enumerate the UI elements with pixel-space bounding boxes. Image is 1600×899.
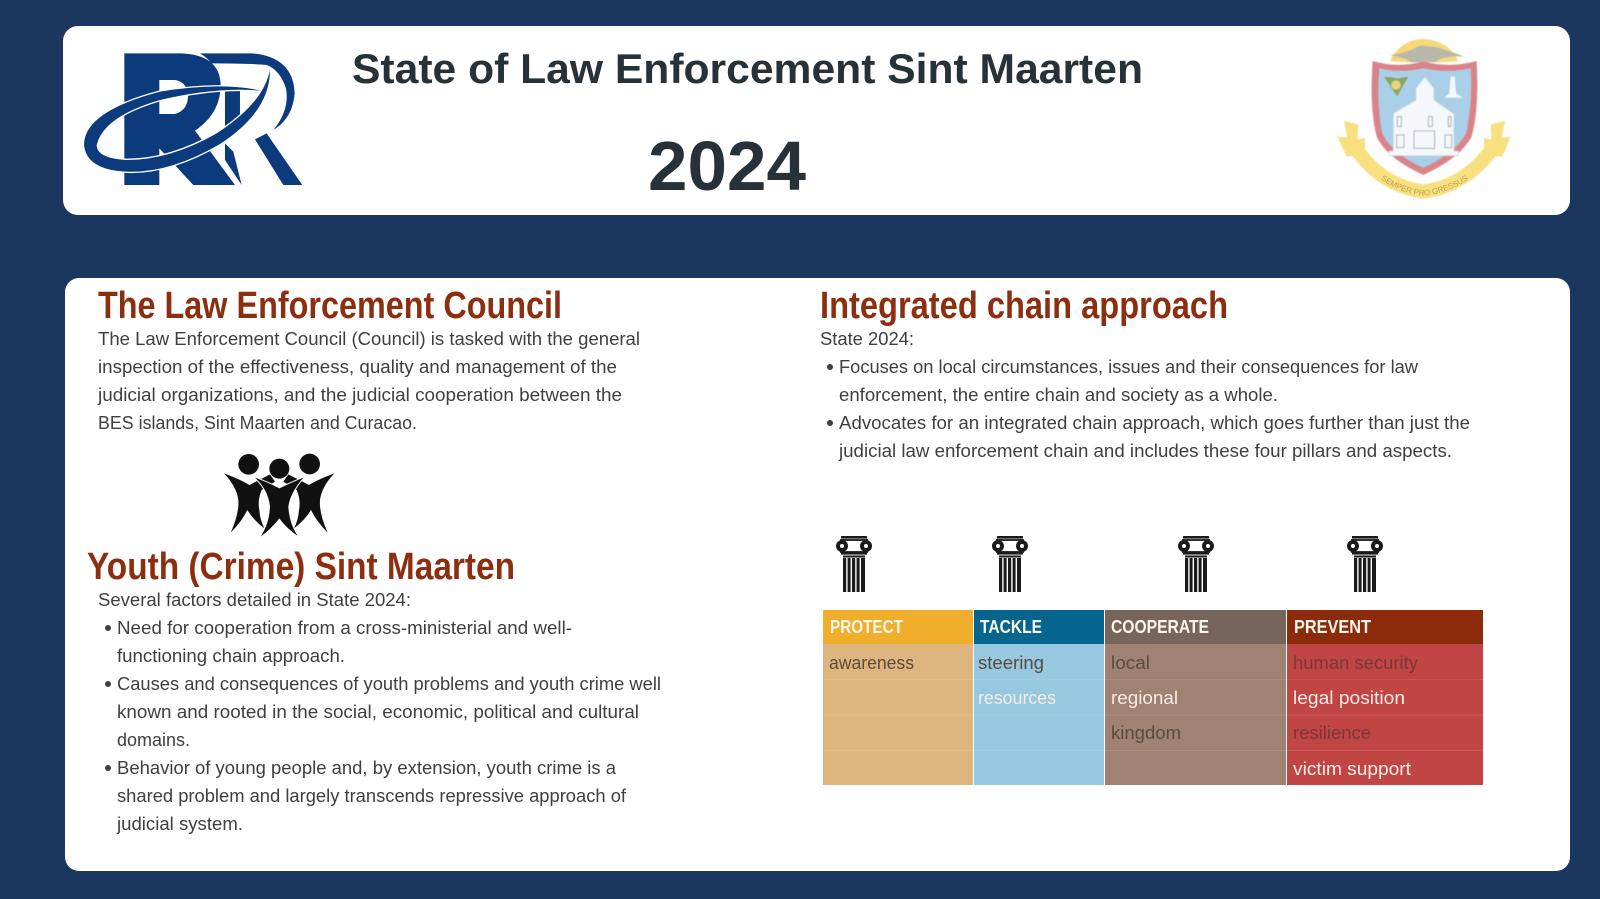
text block: integrated chain approach: judicial law enforcement chain and includes these four pillars and aspects. xyxy=(838,441,1452,461)
text block: youth crime factors: Need for cooperation from a cross-ministerial and well- xyxy=(117,618,572,638)
text block: youth crime factors: shared problem and largely transcends repressive approach of xyxy=(117,786,627,806)
icon: pillar protect xyxy=(836,536,872,592)
icon: pillar prevent xyxy=(1347,536,1383,592)
table: four pillars xyxy=(823,610,1483,785)
year: 2024 xyxy=(648,127,806,205)
text block: integrated chain approach: Focuses on local circumstances, issues and their consequences for law xyxy=(839,357,1419,377)
icon: pillar cooperate xyxy=(1178,536,1214,592)
heading: Integrated chain approach: Integrated chain approach xyxy=(820,285,1228,327)
text block: council description: inspection of the effectiveness, quality and management of the xyxy=(98,357,617,377)
column: prevent: human security xyxy=(1293,653,1418,673)
text block: youth crime factors: domains. xyxy=(117,730,190,750)
text block: youth crime factors: judicial system. xyxy=(116,814,243,834)
heading: The Law Enforcement Council: The Law Enforcement Council xyxy=(98,285,562,327)
text block: youth crime factors: Causes and consequences of youth problems and youth crime well xyxy=(117,674,661,694)
text block: council description: judicial organizations, and the judicial cooperation between the xyxy=(97,385,622,405)
text block: integrated chain approach: Advocates for an integrated chain approach, which goes further than just the xyxy=(839,413,1470,433)
logo: double R with orbit xyxy=(84,53,302,185)
text block: council description: BES islands, Sint Maarten and Curacao. xyxy=(98,413,417,433)
main content panel xyxy=(65,278,1570,871)
text block: integrated chain approach xyxy=(820,329,1470,461)
text block: youth crime factors: Several factors detailed in State 2024: xyxy=(98,590,411,610)
column: prevent: resilience xyxy=(1293,723,1371,743)
column: cooperate: regional xyxy=(1111,688,1178,708)
text block: youth crime factors: known and rooted in the social, economic, political and cultural xyxy=(117,702,639,722)
column: prevent: PREVENT xyxy=(1294,617,1371,637)
column: tackle: TACKLE xyxy=(980,617,1042,637)
column: cooperate: local xyxy=(1111,653,1150,673)
column: prevent: victim support xyxy=(1293,759,1411,779)
text block: council description: The Law Enforcement Council (Council) is tasked with the general xyxy=(98,329,640,349)
column: tackle: steering xyxy=(978,653,1044,673)
column: prevent xyxy=(1287,610,1483,785)
text block: integrated chain approach: State 2024: xyxy=(820,329,914,349)
column: protect: awareness xyxy=(829,653,914,673)
column: tackle: resources xyxy=(978,688,1056,708)
icon: coat of arms of Sint Maarten xyxy=(1337,38,1511,200)
column: protect xyxy=(823,610,973,785)
column: cooperate xyxy=(1105,610,1286,785)
title: State of Law Enforcement Sint Maarten xyxy=(352,45,1143,92)
column: prevent: legal position xyxy=(1293,688,1405,708)
text block: council description xyxy=(97,329,640,433)
text block: integrated chain approach: enforcement, the entire chain and society as a whole. xyxy=(839,385,1278,405)
motto on ribbon: SEMPER PRO GRESSUS xyxy=(1382,176,1468,196)
text block: youth crime factors: functioning chain approach. xyxy=(117,646,345,666)
column: protect: PROTECT xyxy=(830,617,903,637)
header panel xyxy=(63,26,1570,215)
column: tackle xyxy=(974,610,1104,785)
text block: youth crime factors xyxy=(98,590,661,834)
icon: pillar tackle xyxy=(992,536,1028,592)
text block: youth crime factors: Behavior of young people and, by extension, youth crime is a xyxy=(117,758,617,778)
column: cooperate: kingdom xyxy=(1111,723,1181,743)
icon: three people xyxy=(224,454,334,537)
heading: Youth (Crime) Sint Maarten: Youth (Crime) Sint Maarten xyxy=(87,546,515,588)
column: cooperate: COOPERATE xyxy=(1111,617,1209,637)
